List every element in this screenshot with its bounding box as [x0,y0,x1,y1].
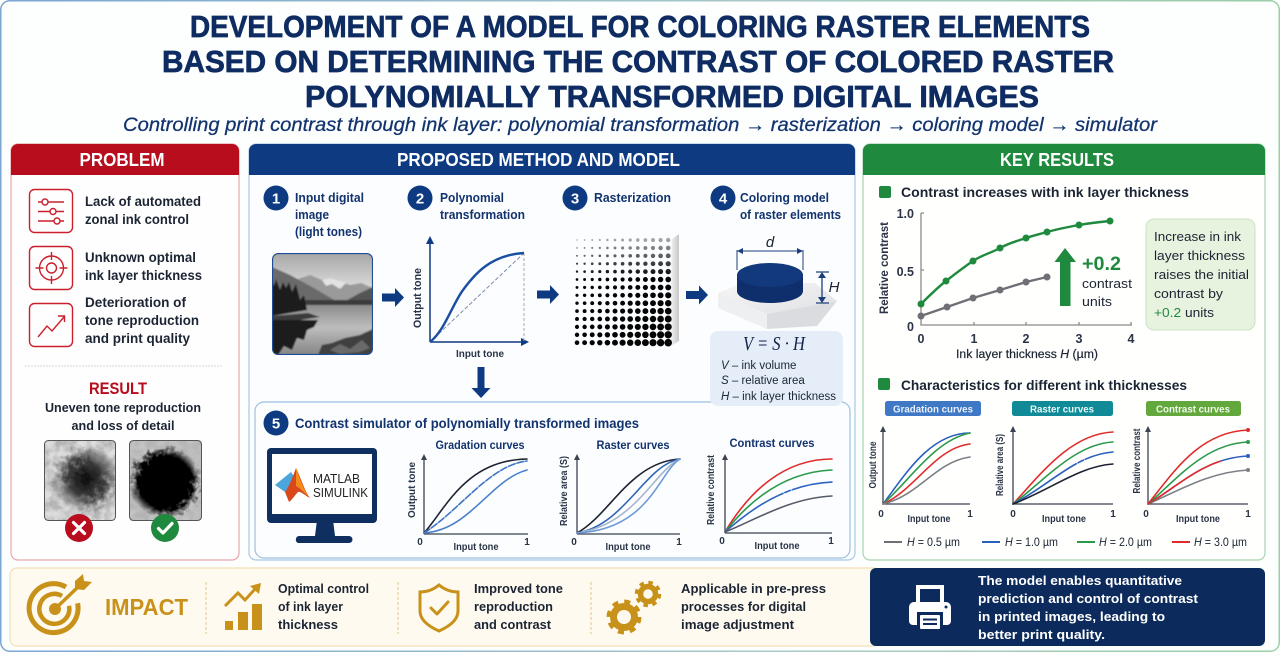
gain label: contrast [1082,276,1132,291]
impact text 2: reproduction [474,600,553,614]
title [162,9,1114,114]
icon: check [151,514,179,542]
icon: monitor with MATLAB Simulink: SIMULINK [313,485,368,500]
step 3 heading [562,186,671,210]
chart: raster curves: Input tone [606,542,651,553]
mini chart: raster: 0 [1010,509,1016,520]
chart: contrast vs ink layer thickness: 2 [1023,332,1030,346]
conclusion text: in printed images, leading to [978,610,1165,624]
chart: contrast curves: 1 [828,536,834,547]
conclusion text: prediction and control of contrast [978,592,1199,606]
problem text 1: Lack of automated [85,194,201,209]
impact text 1 [278,582,369,632]
chart: contrast vs ink layer thickness: Ink layer thickness H (µm) [956,349,1098,361]
problem text 3: tone reproduction [85,313,199,328]
panel: impact [10,568,880,646]
impact text 3: image adjustment [681,618,795,632]
chart: contrast vs ink layer thickness [879,207,1135,361]
step 2 heading: transformation [440,208,525,222]
arrow: 3 to 4 [686,286,708,304]
mini chart: gradation: 1 [967,509,973,520]
impact text 2: Improved tone [474,582,563,596]
chart: contrast vs ink layer thickness: 1.0 [897,207,914,221]
chart: raster curves: Raster curves [596,440,670,452]
gain label [1082,254,1132,309]
mini chart: raster [995,401,1116,525]
ink cylinder diagram [718,234,840,329]
title: DEVELOPMENT OF A MODEL FOR COLORING RASTER ELEMENTS [190,9,1090,44]
gain label: units [1082,294,1113,309]
method header: PROPOSED METHOD AND MODEL [397,150,680,170]
chart: contrast curves [706,438,834,552]
impact text 2: and contrast [474,618,552,632]
problem header: PROBLEM [80,150,164,170]
chart: contrast vs ink layer thickness: 0 [918,332,925,346]
method header [249,144,855,175]
icon: printer [909,585,951,629]
conclusion text: The model enables quantitative [978,574,1182,588]
print sample: uneven [44,440,120,521]
chart: gradation curves: Input tone [454,542,499,553]
problem text 3 [85,295,199,346]
chart: raster curves: Relative area (S) [559,456,570,526]
icon: shield check [420,585,458,631]
chart: raster curves: 1 [676,537,682,548]
mini chart: contrast: 0 [1143,509,1149,520]
step 3 heading: 3 [571,190,579,208]
ink cylinder diagram: d [766,234,775,251]
legend: H = 0.5 µm [907,535,960,549]
impact text 1: Optimal control [278,582,369,596]
impact label: IMPACT [105,594,188,620]
mini chart: gradation: Gradation curves [893,404,973,416]
panel: key results [863,144,1265,560]
image: grayscale landscape [272,253,373,355]
chart: contrast vs ink layer thickness: 0 [907,320,914,334]
results subheading 2: Characteristics for different ink thicknesses [901,377,1187,393]
impact text 1: of ink layer [278,600,343,614]
problem header [11,144,239,175]
chart: gradation curves: 1 [524,537,530,548]
step 1 heading: image [295,208,329,222]
chart: contrast curves: Input tone [754,541,800,552]
mini chart: raster: Relative area (S) [995,434,1006,496]
chart: contrast vs ink layer thickness: 1 [971,332,978,346]
icon: crosshair target [30,246,72,290]
chart: contrast curves: 0 [719,536,725,547]
legend: H = 2.0 µm [1099,535,1152,549]
result text: and loss of detail [72,419,174,433]
mini chart: contrast: Contrast curves [1156,404,1230,416]
formula box [710,331,843,406]
chart: contrast curves: Contrast curves [730,438,814,450]
callout: raises the initial [1154,267,1249,282]
step 5 heading: Contrast simulator of polynomially transformed images [295,416,639,431]
results header [863,144,1265,175]
chart: gradation curves [407,440,530,553]
step 1 heading: Input digital [295,191,364,205]
mini chart: raster: 1 [1110,509,1116,520]
step 5 heading [264,410,639,436]
arrow: 2 to simulator [472,367,490,398]
mini chart: contrast: 1 [1245,509,1251,520]
legend [884,535,1247,549]
problem text 1 [85,194,201,227]
callout: +0.2 units [1154,305,1215,320]
mini chart: raster: Raster curves [1030,404,1094,416]
mini chart: raster: Input tone [1042,514,1086,525]
icon: cross [65,514,93,542]
chart: gradation curves: 0 [417,537,423,548]
chart: polynomial curve: Input tone [456,348,504,360]
title: POLYNOMIALLY TRANSFORMED DIGITAL IMAGES [305,79,1039,114]
step 1 heading: 1 [272,190,280,208]
problem text 3: and print quality [85,331,190,346]
step 4 heading: of raster elements [740,208,841,222]
icon: monitor with MATLAB Simulink [267,448,377,543]
impact text 3: Applicable in pre-press [681,582,826,596]
legend: H = 1.0 µm [1005,535,1058,549]
problem text 2: ink layer thickness [85,268,202,283]
problem text 3: Deterioration of [85,295,186,310]
chart: raster curves [559,440,682,553]
step 5 heading: 5 [272,416,280,432]
step 4 heading: Coloring model [740,191,829,205]
step 1 heading [264,186,364,239]
mini chart: gradation [868,401,981,525]
step 2 heading: 2 [416,190,424,208]
chart: contrast vs ink layer thickness: 0.5 [897,265,914,279]
formula box: V – ink volume [721,360,796,372]
icon: rising line [30,304,72,346]
simulator panel [255,402,850,558]
chart: polynomial curve: Output tone [412,268,424,328]
halftone raster [572,234,679,346]
mini chart: contrast: Input tone [1176,514,1220,525]
arrow: contrast gain [1054,248,1076,306]
icon: sliders [30,190,72,232]
result text [45,401,201,433]
results header: KEY RESULTS [1000,150,1114,170]
mini chart: gradation: Input tone [908,514,951,525]
step 2 heading [408,186,525,222]
impact text 3: processes for digital [681,600,806,614]
icon: target with arrow [29,574,92,633]
legend: H = 3.0 µm [1194,535,1247,549]
print sample: good [129,440,202,521]
result heading: RESULT [89,380,147,398]
formula box: V = S · H [743,333,806,355]
impact text 2 [474,582,563,632]
subtitle: Controlling print contrast through ink layer: polynomial transformation → rasterization → coloring model → simulator [123,115,1158,136]
step 4 heading: 4 [719,190,728,208]
formula box: S – relative area [721,375,805,387]
icon: monitor with MATLAB Simulink: MATLAB [313,471,360,486]
chart: contrast vs ink layer thickness: 3 [1076,332,1083,346]
chart: contrast vs ink layer thickness: Relative contrast [879,222,891,314]
step 2 heading: Polynomial [440,191,504,205]
formula box: H – ink layer thickness [721,391,836,403]
callout: Increase in ink [1154,229,1242,244]
problem text 2 [85,250,202,283]
impact text 1: thickness [278,618,338,632]
chart: contrast curves: Relative contrast [706,454,717,525]
result text: Uneven tone reproduction [45,401,201,415]
icon: bar chart rising [225,583,262,630]
mini chart: gradation: 0 [878,509,884,520]
callout: contrast by [1154,286,1224,301]
step 4 heading [710,186,841,222]
conclusion text [978,574,1199,642]
panel: problem [11,144,239,560]
chart: polynomial curve [412,236,529,360]
chart: gradation curves: Gradation curves [436,440,524,452]
ink cylinder diagram: H [829,279,840,296]
problem text 2: Unknown optimal [85,250,196,265]
results subheading 1: Contrast increases with ink layer thickness [901,184,1189,200]
panel: conclusion [870,568,1265,646]
callout [1146,219,1255,330]
step 3 heading: Rasterization [594,191,671,205]
chart: contrast vs ink layer thickness: 4 [1128,332,1135,346]
panel: proposed method [249,144,855,560]
arrow: 1 to 2 [382,288,404,307]
title: BASED ON DETERMINING THE CONTRAST OF COLORED RASTER [162,44,1114,79]
conclusion text: better print quality. [978,628,1105,642]
mini chart: contrast: Relative contrast [1132,428,1143,494]
icon: gears [609,583,659,632]
mini chart: gradation: Output tone [868,441,879,488]
problem text 1: zonal ink control [85,212,189,227]
gain label: +0.2 [1082,254,1121,275]
step 1 heading: (light tones) [295,225,362,239]
chart: gradation curves: Output tone [407,462,418,518]
callout: layer thickness [1154,248,1246,263]
arrow: 2 to 3 [537,285,559,304]
impact text 3 [681,582,826,632]
chart: raster curves: 0 [571,537,577,548]
mini chart: contrast [1132,401,1251,525]
